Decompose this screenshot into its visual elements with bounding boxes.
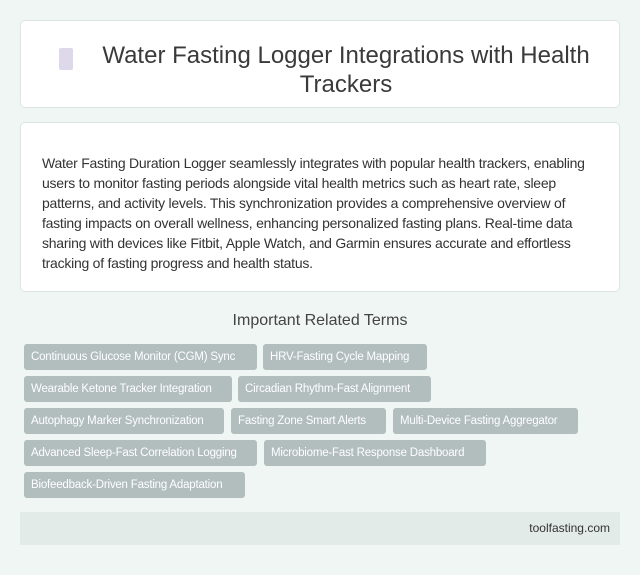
tags: Continuous Glucose Monitor (CGM) Sync: [31, 351, 235, 363]
tags: Biofeedback-Driven Fasting Adaptation: [31, 479, 222, 491]
tags: Microbiome-Fast Response Dashboard: [271, 447, 464, 459]
footer: [20, 512, 620, 545]
header card: [20, 20, 620, 108]
description card: [20, 122, 620, 292]
tags: Fasting Zone Smart Alerts: [238, 415, 366, 427]
tags: Advanced Sleep-Fast Correlation Logging: [31, 447, 237, 459]
icon: receipt: [59, 48, 73, 70]
tags: Autophagy Marker Synchronization: [31, 415, 204, 427]
tags: Multi-Device Fasting Aggregator: [400, 415, 557, 427]
tags: Circadian Rhythm-Fast Alignment: [245, 383, 410, 395]
footer text: toolfasting.com: [529, 521, 610, 535]
tags: HRV-Fasting Cycle Mapping: [270, 351, 409, 363]
title: Water Fasting Logger Integrations with Health Trackers: [102, 42, 590, 98]
tags: Wearable Ketone Tracker Integration: [31, 383, 212, 395]
description text: Water Fasting Duration Logger seamlessly integrates with popular health trackers, enabling users to monitor fasting periods alongside vital health metrics such as heart rate, sleep patterns, and activity levels. This synchronization provides a comprehensive overview of fasting impacts on overall wellness, enhancing personalized fasting plans. Real-time data sharing with devices like Fitbit, Apple Watch, and Garmin ensures accurate and effortless tracking of fasting progress and health status.: [42, 155, 585, 271]
terms heading: Important Related Terms: [233, 312, 407, 329]
